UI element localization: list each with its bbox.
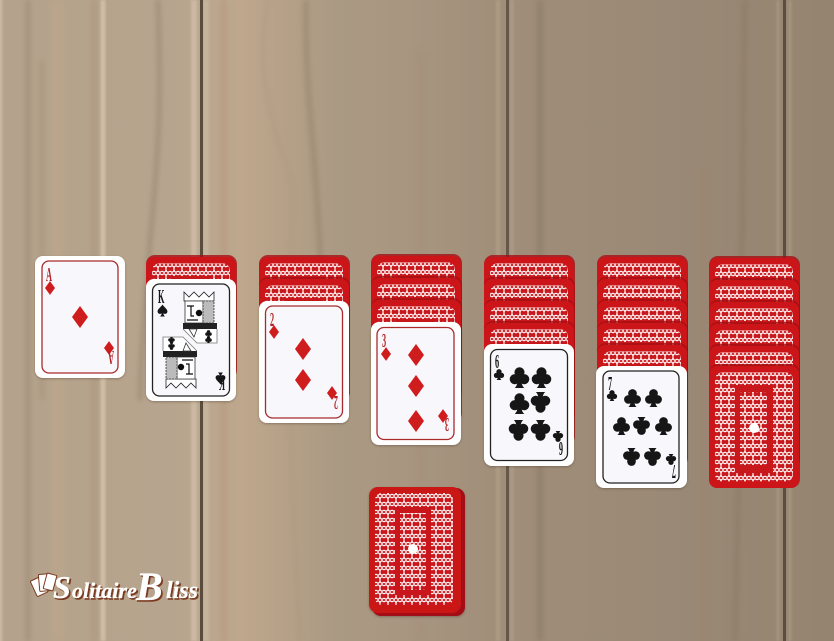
column 1: ace of diamonds: A [46,265,52,286]
logo wordmark: B [136,566,164,610]
two of diamonds [259,301,349,423]
column 2: face-down card and king of spades [146,255,237,401]
column 3: face-down cards and two of diamonds [259,255,350,423]
king of spades: K [158,287,165,308]
seven of clubs [596,366,687,488]
column 6: face-down cards and seven of clubs [596,255,688,488]
column 1: ace of diamonds: A [108,346,114,367]
two of diamonds: 2 [270,310,274,331]
two of diamonds: 2 [334,391,338,412]
column 5: face-down cards and six of clubs [484,255,575,466]
logo wordmark: B [135,564,163,609]
logo wordmark: olitaire [74,580,139,604]
three of diamonds: 3 [382,331,386,352]
six of clubs: 6 [495,352,499,373]
stock pile [369,487,465,616]
logo wordmark: liss [168,580,200,606]
three of diamonds: 3 [445,413,449,434]
logo wordmark: S [54,570,72,606]
logo wordmark [53,564,200,610]
logo wordmark: liss [166,578,198,604]
Solitaire Bliss logo [30,564,200,610]
six of clubs: 6 [559,437,563,458]
icon: card fan [30,573,57,597]
king of spades: K [218,372,225,393]
column 4: face-down cards and three of diamonds [371,254,462,445]
column 7: all face-down cards [709,256,800,488]
logo wordmark: olitaire [72,578,137,603]
king of spades [146,279,236,401]
six of clubs [484,344,574,466]
seven of clubs: 7 [608,374,612,395]
column 1: ace of diamonds [35,256,125,378]
seven of clubs: 7 [672,460,676,481]
three of diamonds [371,322,461,445]
face-down card [146,255,237,379]
logo wordmark: S [53,569,71,605]
